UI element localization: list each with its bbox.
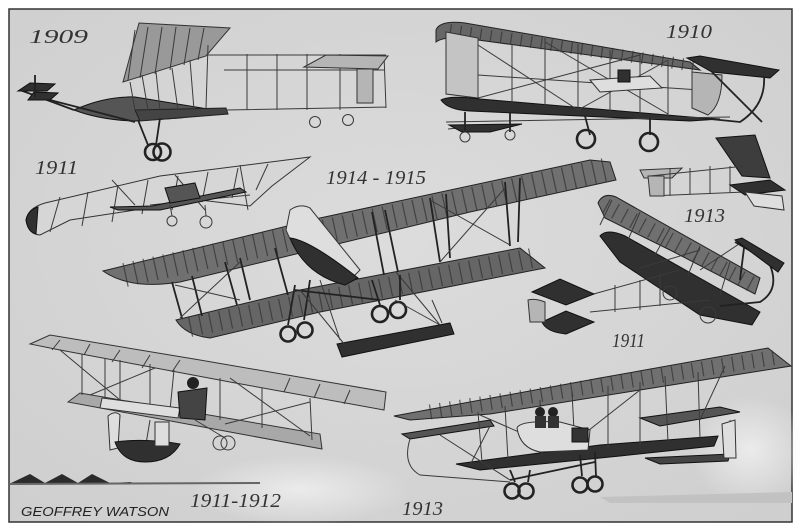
year label 1911 right: 1911	[612, 330, 645, 352]
artist credit: GEOFFREY WATSON	[21, 504, 170, 519]
aeroplane 1911 upper left	[26, 157, 310, 235]
year label 1914-1915: 1914 - 1915	[326, 167, 426, 189]
aeroplane 1911-1912	[30, 335, 386, 462]
distant ground line right	[600, 492, 792, 503]
year label 1911-1912: 1911-1912	[190, 490, 281, 512]
year label 1910: 1910	[666, 21, 712, 43]
year label 1913 right: 1913	[684, 205, 725, 227]
distant hangars on horizon	[9, 474, 260, 484]
aeroplane 1911 right	[528, 195, 784, 334]
year label 1909: 1909	[29, 26, 88, 48]
aeroplane 1914-1915	[103, 160, 616, 357]
aeroplane 1913 upper right	[640, 135, 785, 210]
year label 1911 left: 1911	[35, 157, 78, 179]
aeroplane 1909	[18, 23, 388, 160]
aeroplane 1910	[436, 22, 779, 151]
aeroplane 1913 lower right	[394, 348, 791, 498]
year label 1913 bottom: 1913	[402, 498, 443, 520]
